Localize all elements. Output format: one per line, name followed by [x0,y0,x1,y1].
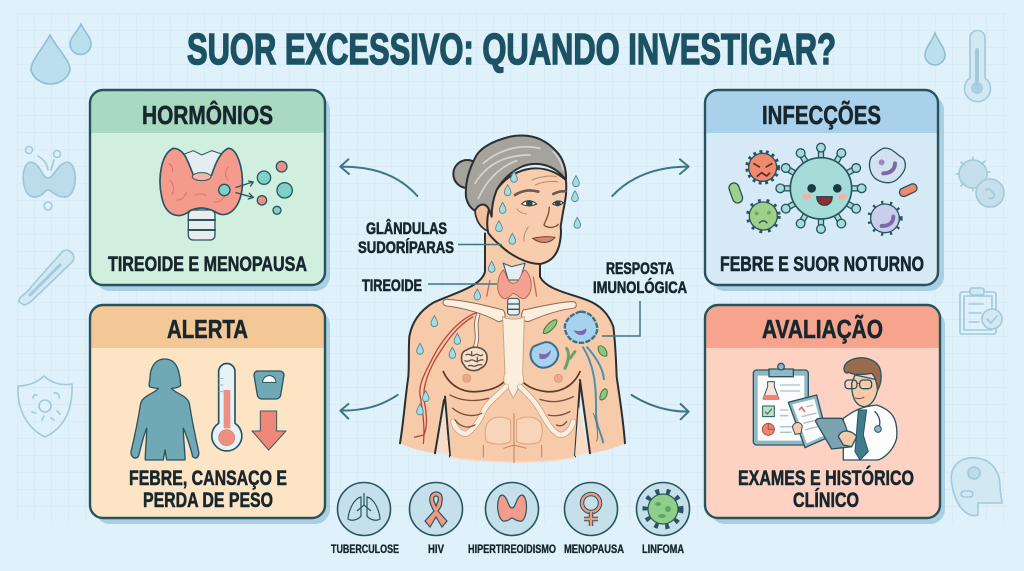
caption: alerta [129,467,287,512]
caption: hormônios: TIREOIDE E MENOPAUSA [108,253,307,276]
caption: avaliação: EXAMES E HISTÓRICO [738,466,914,490]
icon: menopausa [564,482,624,556]
heading: hormônios: HORMÔNIOS [142,100,273,130]
icon: tuberculose [331,482,399,556]
caption: alerta: PERDA DE PESO [143,489,273,512]
icon: tuberculose: TUBERCULOSE [331,544,399,556]
chest lines [443,372,580,392]
icon: hipertireoidismo [468,482,556,556]
label: resposta imunológica: RESPOSTA [606,260,674,278]
label: resposta imunológica [593,260,687,336]
torso and arms [400,233,625,462]
decorative icon: left thermometer [19,250,74,305]
hair [466,135,566,217]
label: resposta imunológica: IMUNOLÓGICA [593,278,687,297]
icon: linfoma [636,482,690,556]
icon: hipertireoidismo: HIPERTIREOIDISMO [468,544,556,556]
decorative icon: right head [951,458,1002,516]
decorative icon: left shield [18,376,72,437]
heading: alerta: ALERTA [167,314,248,344]
clavicles and sternum [443,299,576,322]
heading: infecções: INFECÇÕES [762,100,881,130]
caption: alerta: FEBRE, CANSAÇO E [129,467,287,490]
connector arrows [340,159,689,419]
central anatomy figure [340,135,689,463]
icon row: related conditions [331,482,690,556]
label: tireoide [362,277,497,295]
icon: weighing scale with down arrow [252,371,286,450]
decorative icon: right microbes [956,157,1004,207]
label: glândulas sudoríparas: SUDORÍPARAS [358,238,454,257]
decorative icon: left drops [31,24,91,84]
panel: alerta [90,305,330,524]
facial features [515,191,565,195]
label: glândulas sudoríparas: GLÂNDULAS [366,219,447,238]
icon: hiv [410,482,462,556]
heading: avaliação: AVALIAÇÃO [762,314,883,344]
decorative icon: right clipboard [960,288,1002,334]
panel: infecções [705,90,944,291]
icon: linfoma: LINFOMA [642,544,684,556]
decorative icon: right drop [925,33,945,65]
icon: clipboard and doctor [753,358,897,460]
decorative icon: right thermometer [964,31,990,102]
sweat drops [417,171,581,415]
label: tireoide: TIREOIDE [362,277,422,295]
caption: avaliação: CLÍNICO [793,489,859,512]
face [487,168,566,264]
abdominal details [485,417,542,444]
decorative icon: left thyroid [23,146,75,210]
icon: silhouette [131,359,199,460]
gap shading between arm and torso [437,407,589,456]
icon: thyroid with hormones [160,148,292,240]
icon: menopausa: MENOPAUSA [564,544,624,556]
icon: microbes [728,143,918,233]
ear [475,204,493,231]
caption: infecções: FEBRE E SUOR NOTURNO [720,253,924,276]
icon: hiv: HIV [428,544,444,556]
panel: avaliação [705,305,945,524]
blood vessels [414,313,477,444]
immune cells [565,312,597,343]
icon: thermometer [212,363,242,451]
hair bun [453,160,481,188]
thyroid in neck [503,263,525,280]
sweat gland [475,314,478,347]
panel: hormônios [90,90,330,291]
ribs [453,387,506,434]
label: glândulas sudoríparas [358,219,502,257]
caption: avaliação [738,466,914,512]
